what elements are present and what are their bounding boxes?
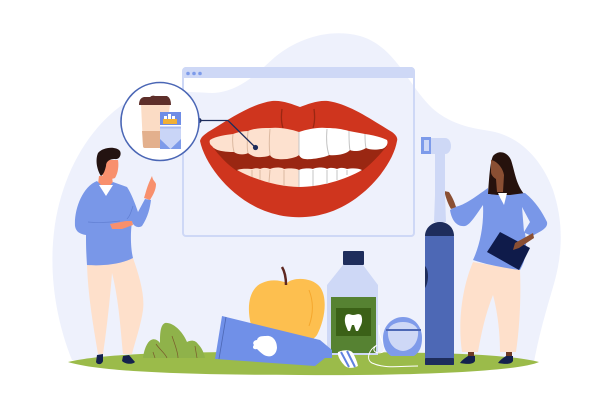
woman legs visible: [468, 352, 512, 358]
white upper teeth: [299, 128, 388, 159]
woman hair back: [488, 152, 526, 196]
woman pullover: [450, 188, 547, 270]
apple: [249, 267, 325, 343]
tube cap: [338, 350, 358, 368]
window dots: [186, 72, 202, 75]
upper tooth gaps: [233, 129, 270, 155]
man face: [102, 160, 118, 179]
mouthwash bottle: [327, 251, 378, 355]
brush handle: [425, 222, 454, 365]
stained upper teeth: [210, 128, 299, 159]
white lower teeth: [299, 168, 362, 187]
gap between woman's arm and body: [522, 207, 530, 232]
man hands: [110, 176, 156, 229]
bottle cap: [343, 251, 364, 265]
man pullover: [75, 181, 151, 265]
icon: cigarette pack: [160, 112, 181, 149]
apple highlight: [309, 290, 312, 326]
woman clipboard: [487, 232, 530, 270]
brush bristles: [421, 137, 431, 154]
ground: [68, 352, 539, 375]
apple stem: [282, 267, 286, 285]
white smile illustration: [200, 101, 397, 217]
man shoes: [96, 354, 135, 364]
browser window: [183, 67, 414, 236]
brush head: [430, 138, 451, 154]
floss box: [383, 317, 422, 356]
floss string: [369, 325, 418, 367]
bush veins: [153, 336, 197, 358]
woman hands: [444, 191, 534, 250]
pointer line from circle to tooth: [196, 118, 258, 150]
man: [75, 148, 156, 364]
bush: [143, 323, 205, 358]
stained lower teeth: [237, 168, 299, 187]
lower tooth gaps: [252, 170, 284, 186]
lips: [200, 101, 397, 217]
dental floss: [369, 317, 422, 367]
toothpaste tube: [215, 316, 358, 368]
electric toothbrush: [421, 137, 454, 365]
icon: coffee cup: [139, 96, 171, 148]
brush neck: [434, 154, 446, 222]
man neck and face: [98, 176, 113, 190]
man trousers: [87, 258, 143, 354]
mouth interior: [212, 146, 387, 171]
man hair: [97, 148, 121, 176]
woman shirt collar: [498, 193, 507, 205]
callout circle: coffee and cigarettes: [121, 82, 199, 160]
woman: [444, 152, 547, 364]
man shirt collar: [99, 185, 113, 196]
lip crease: [281, 109, 315, 128]
background blob: [52, 33, 561, 362]
bottle label: [331, 297, 376, 353]
icon: tooth on tube: [253, 336, 277, 356]
woman shoes: [460, 356, 513, 364]
icon: tooth: [345, 314, 362, 331]
woman face: [491, 160, 504, 192]
window title bar: [183, 67, 414, 78]
woman trousers: [460, 262, 520, 352]
